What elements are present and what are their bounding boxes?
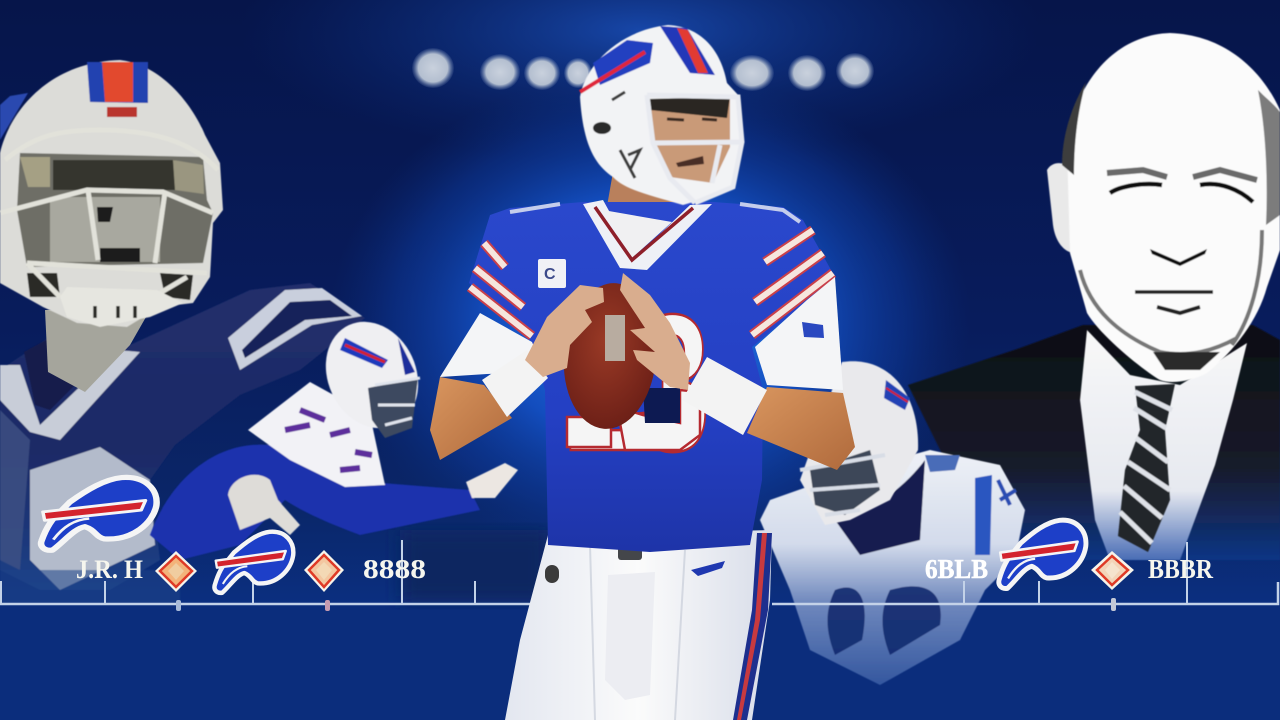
collar xyxy=(583,200,712,270)
suit jacket xyxy=(908,325,1280,560)
neck xyxy=(606,172,700,225)
left ear xyxy=(1047,163,1072,253)
helmet logo xyxy=(593,40,653,85)
captain patch: C xyxy=(544,266,556,283)
helmet stripe xyxy=(660,26,715,75)
helmet scuffs xyxy=(612,92,640,178)
center quarterback xyxy=(430,25,855,720)
timeline dates: J.R. H xyxy=(76,555,143,584)
visor opening xyxy=(17,153,213,300)
helmet side logo xyxy=(0,93,28,140)
helmet xyxy=(580,25,742,205)
left hand xyxy=(525,285,604,377)
right hand xyxy=(620,273,690,390)
sleeve stripes xyxy=(470,230,833,336)
jersey number xyxy=(562,274,710,492)
timeline dates: 8888 xyxy=(363,554,426,584)
head xyxy=(1047,33,1280,382)
timeline dates xyxy=(76,554,1213,584)
eyes and brows xyxy=(1107,170,1257,180)
helmet stripe xyxy=(87,62,148,117)
kicker player xyxy=(150,307,518,560)
dress shirt xyxy=(1080,330,1247,560)
football xyxy=(558,279,662,433)
left arm xyxy=(430,377,512,460)
jowls and chin xyxy=(1080,230,1262,354)
captain patch xyxy=(538,259,566,288)
shoulder trim xyxy=(510,204,800,222)
wristbands xyxy=(482,350,548,417)
right player: helmet xyxy=(800,361,918,525)
Bills logo: timeline right xyxy=(999,520,1086,589)
mouth xyxy=(1135,290,1213,294)
timeline xyxy=(0,540,1278,611)
right player: white jersey xyxy=(760,450,1025,685)
white undersleeves xyxy=(440,313,545,377)
jersey number: 13 xyxy=(562,274,710,492)
right arm xyxy=(747,387,855,470)
hair edge xyxy=(1062,82,1086,175)
nose xyxy=(1150,249,1207,266)
timeline dates: BBBR xyxy=(1148,554,1213,584)
diamond badge 2 xyxy=(304,550,344,592)
left player: helmet xyxy=(0,60,223,327)
left player: jersey xyxy=(0,283,365,605)
jersey xyxy=(469,202,835,552)
timeline dates: 6BLB xyxy=(925,554,988,584)
Bills logo: timeline left xyxy=(214,532,293,593)
Bills logo: left player chest xyxy=(41,477,157,550)
old man portrait xyxy=(908,33,1280,560)
pants xyxy=(505,530,772,720)
striped necktie xyxy=(1118,384,1175,552)
quarterback face xyxy=(648,97,730,183)
stadium floodlights xyxy=(412,48,874,91)
diamond badge 1 xyxy=(155,551,197,592)
football laces xyxy=(605,315,625,361)
diamond badge 3 xyxy=(1091,551,1134,590)
skull and face xyxy=(1067,33,1280,382)
timeline marker dots xyxy=(176,598,1116,611)
face mask xyxy=(647,95,742,203)
ear hole xyxy=(593,122,611,134)
left player: neck xyxy=(45,310,150,392)
chin guard xyxy=(60,287,183,327)
face cage xyxy=(0,130,218,297)
